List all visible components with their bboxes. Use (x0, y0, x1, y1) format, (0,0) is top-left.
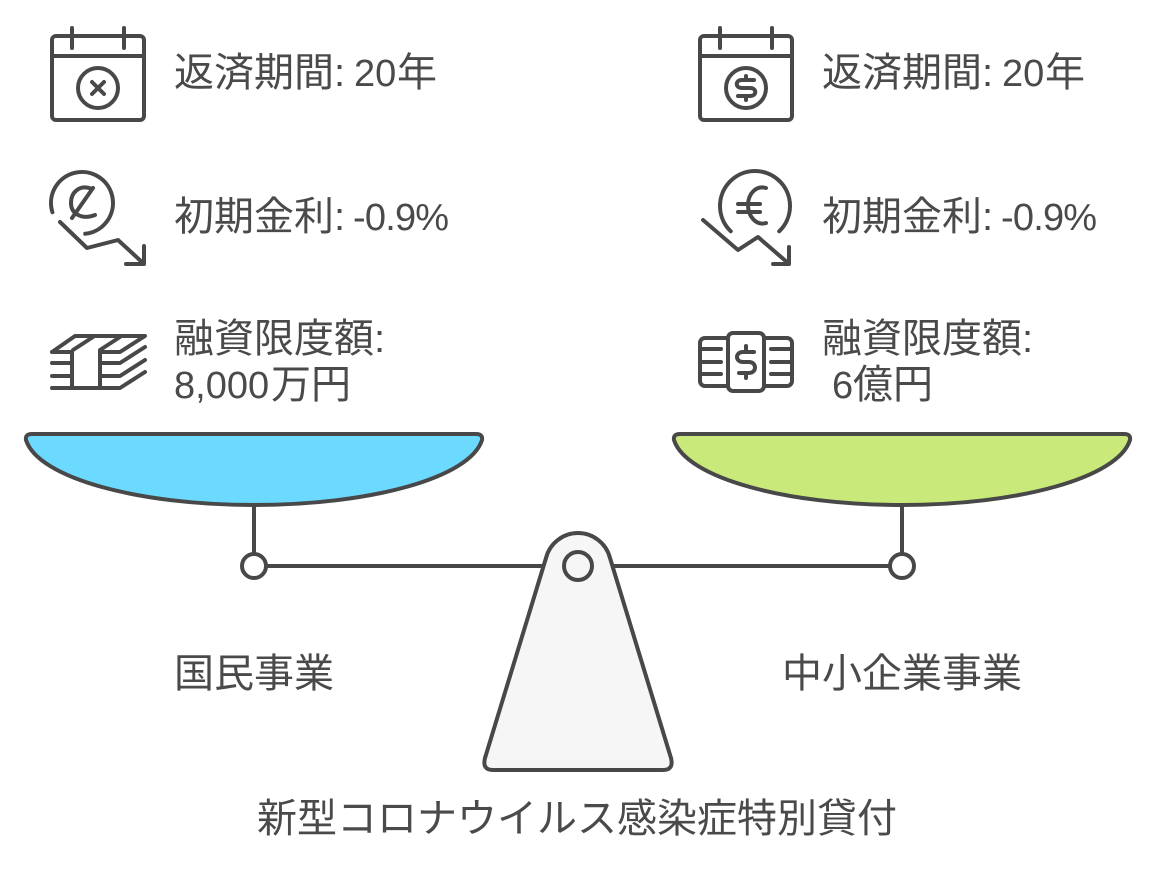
icon: banknote bundle with dollar (700, 333, 792, 391)
icon: stacked banknotes (52, 336, 145, 388)
icon: falling euro coin (703, 171, 790, 264)
fulcrum center circle (564, 552, 592, 580)
fulcrum base (484, 533, 672, 770)
right pivot circle (890, 554, 914, 578)
icon: falling colon coin (51, 172, 144, 264)
text: left initial interest rate: -0.9% (353, 197, 448, 239)
left pivot circle (242, 554, 266, 578)
text: right initial interest rate: -0.9% (1001, 197, 1096, 239)
text: right repayment period: 年 (1045, 51, 1085, 95)
text: left loan limit amount: 万円 (271, 363, 351, 407)
title: special COVID loan: 新型コロナウイルス感染症特別貸付 (257, 797, 897, 841)
text: left initial interest rate: 初期金利: (174, 195, 345, 239)
label: SME business: 中小企業事業 (782, 652, 1022, 696)
right scale pan: green (674, 434, 1130, 505)
text: left loan limit: 融資限度額: (174, 317, 385, 361)
label: national business: 国民事業 (174, 652, 334, 696)
text: right loan limit: 融資限度額: (822, 317, 1033, 361)
text: right loan limit amount: 6 (832, 365, 853, 407)
text: left repayment period: 20 (354, 53, 396, 95)
right connector: beam and hanger (612, 505, 902, 566)
text: left repayment period: 返済期間: (174, 51, 345, 95)
text: left loan limit amount: 8,000 (174, 365, 269, 407)
icon: calendar with dollar (700, 28, 792, 120)
text: right loan limit amount: 億円 (853, 363, 933, 407)
left connector: beam and hanger (254, 505, 545, 566)
text: right initial interest rate: 初期金利: (822, 195, 993, 239)
text: right repayment period: 返済期間: (822, 51, 993, 95)
text: right repayment period: 20 (1002, 53, 1044, 95)
icon: calendar with x (52, 28, 144, 120)
left scale pan: blue (26, 434, 482, 505)
text: left repayment period: 年 (397, 51, 437, 95)
